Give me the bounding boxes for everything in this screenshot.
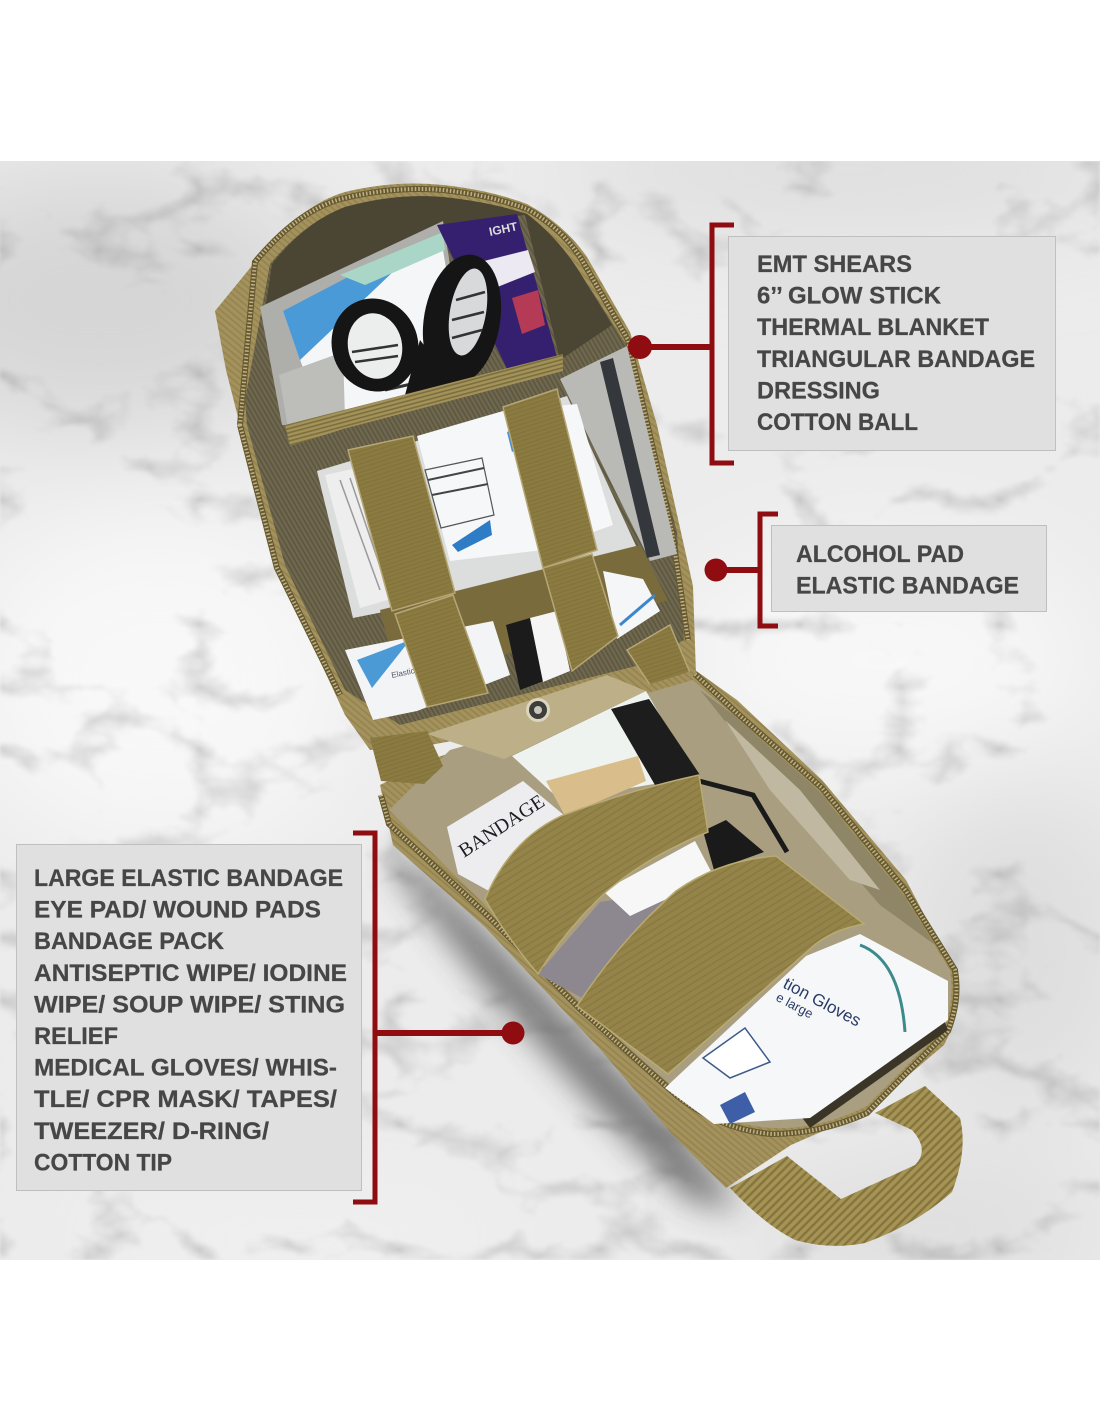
callout: middle contents	[704, 514, 1046, 626]
callout: upper flap contents	[628, 225, 1056, 463]
large bandage	[447, 781, 565, 891]
label panel: DRESSING	[757, 377, 880, 404]
label panel: TRIANGULAR BANDAGE	[757, 346, 1035, 373]
leader line and bracket	[628, 225, 734, 463]
upper flap zipper	[240, 189, 688, 695]
label panel: ANTISEPTIC WIPE/ IODINE	[34, 960, 347, 987]
label panel: RELIEF	[34, 1023, 118, 1050]
label panel: COTTON BALL	[757, 409, 918, 436]
gap shadow beside gloves	[800, 1010, 948, 1128]
label panel: COTTON TIP	[34, 1149, 172, 1176]
lower body shell	[380, 670, 959, 1188]
label panel	[16, 844, 362, 1190]
lower body lining	[389, 680, 952, 1128]
elastic strap two	[577, 856, 864, 1074]
alcohol pad box	[417, 404, 613, 561]
label panel: LARGE ELASTIC BANDAGE	[34, 865, 343, 892]
inner tan flap with grommet	[370, 675, 646, 784]
leader line and bracket	[353, 833, 524, 1202]
label panel: ALCOHOL PAD	[796, 541, 964, 568]
pocket webbing band	[285, 354, 563, 446]
callout: lower body contents	[16, 833, 524, 1202]
label panel: ELASTIC BANDAGE	[796, 573, 1019, 600]
elastic strap one	[485, 775, 708, 974]
label panel: WIPE/ SOUP WIPE/ STING	[34, 991, 345, 1018]
medical gloves package: e large	[774, 989, 816, 1021]
label panel: 6’’ GLOW STICK	[757, 283, 942, 310]
label panel: EMT SHEARS	[757, 251, 912, 278]
label panel: MEDICAL GLOVES/ WHIS-	[34, 1055, 337, 1082]
large bandage: BANDAGE	[455, 790, 549, 862]
medical gloves package	[665, 934, 948, 1124]
hook and loop straps, upper flap	[348, 389, 693, 707]
label panel: TWEEZER/ D-RING/	[34, 1118, 269, 1145]
elastic bandage rolls	[345, 571, 660, 720]
elastic bandage rolls: Elastic	[391, 666, 415, 680]
upper flap outer shell	[215, 184, 696, 750]
EMT shears	[319, 248, 511, 404]
black tweezers and cord	[699, 781, 787, 870]
thermal blanket package	[260, 221, 470, 428]
black D-ring whistle tool	[611, 699, 700, 785]
lower zipper	[381, 674, 956, 1134]
gauze card	[512, 691, 695, 800]
cotton tips	[546, 756, 646, 816]
leader line and bracket	[704, 514, 778, 626]
medical gloves package: tion Gloves	[780, 974, 864, 1030]
lower dark band	[380, 545, 668, 690]
label panel: TLE/ CPR MASK/ TAPES/	[34, 1086, 337, 1113]
side clear bag	[560, 346, 677, 561]
pouch: first aid kit	[215, 184, 963, 1246]
cotton swabs bundle	[603, 841, 714, 916]
label panel	[728, 236, 1056, 450]
plastic bag with alcohol pads	[317, 396, 643, 618]
pouch handle	[730, 1086, 963, 1246]
label panel: BANDAGE PACK	[34, 928, 225, 955]
glow stick purple pack: IGHT	[488, 219, 519, 239]
pouch drop shadow	[395, 850, 740, 1210]
label panel	[772, 526, 1046, 612]
silver roll	[538, 884, 714, 999]
dark upper rim of lining	[265, 196, 612, 360]
label panel: EYE PAD/ WOUND PADS	[34, 897, 321, 924]
upper flap interior lining	[245, 196, 684, 725]
label panel: THERMAL BLANKET	[757, 314, 989, 341]
glow stick purple pack	[437, 214, 557, 375]
